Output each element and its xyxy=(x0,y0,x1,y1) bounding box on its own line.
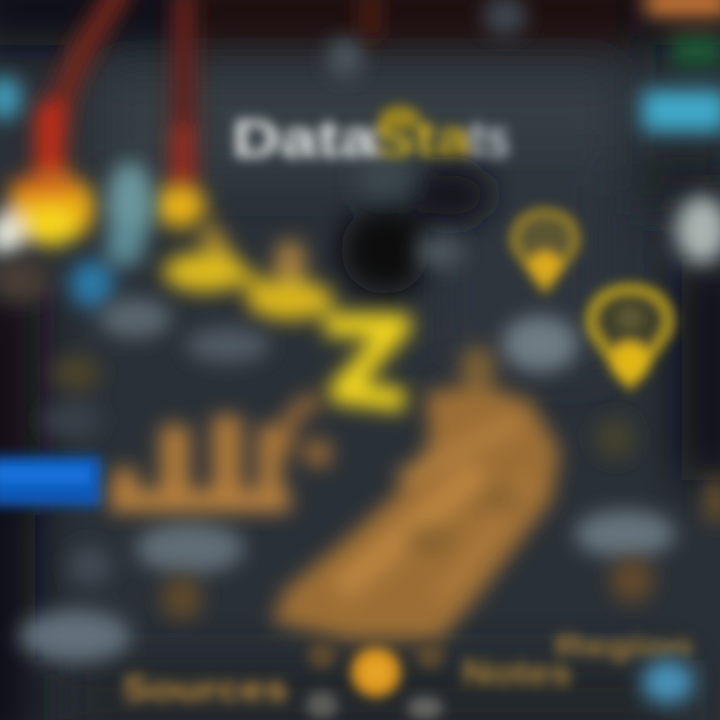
small orange markers xyxy=(162,480,720,620)
bottom centre icon xyxy=(306,641,444,720)
grey labels xyxy=(19,234,675,662)
bottom right blue icon xyxy=(642,660,694,704)
title xyxy=(232,106,510,169)
blue bar left xyxy=(0,456,102,506)
yellow zigzag chart xyxy=(163,225,405,400)
bottom caption right: Region xyxy=(555,630,693,663)
title: Data xyxy=(232,109,378,169)
left edge accents xyxy=(0,76,154,308)
pin icon: right small xyxy=(514,212,576,290)
red cables top left xyxy=(50,0,370,185)
bottom caption right: Notes xyxy=(462,652,572,693)
dark circle centre xyxy=(341,165,492,294)
bottom caption right xyxy=(462,630,693,693)
top right accents xyxy=(327,0,720,264)
orange bar chart xyxy=(110,400,331,512)
title: Sta xyxy=(372,109,473,169)
orange map shape xyxy=(272,346,560,640)
pin icon: right large xyxy=(590,288,670,385)
title: ts xyxy=(470,109,510,169)
yellow connector left xyxy=(0,172,206,256)
bottom caption left: Sources xyxy=(122,668,288,709)
